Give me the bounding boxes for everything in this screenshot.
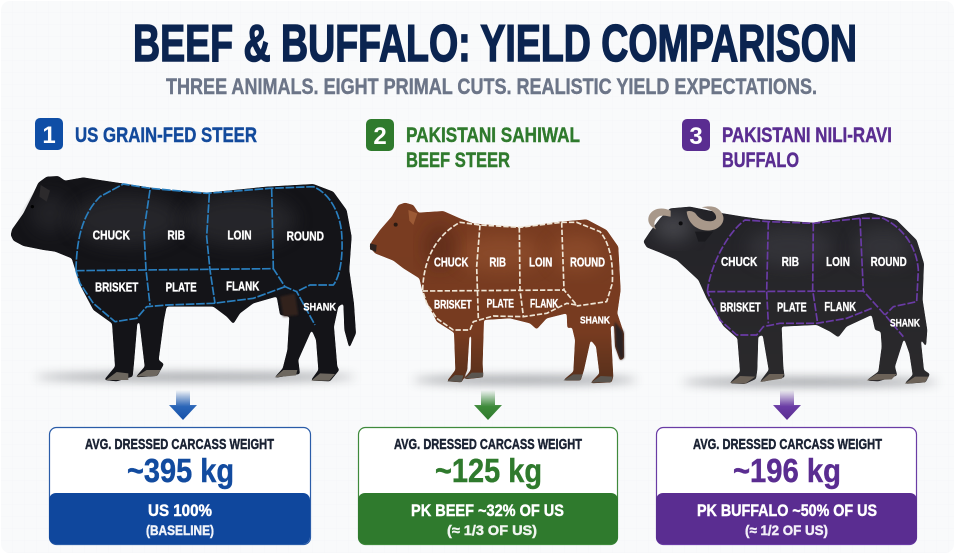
cut labels 1: CHUCK bbox=[93, 227, 130, 242]
badge 1: 1 bbox=[42, 122, 56, 149]
arrow 3 bbox=[773, 390, 801, 420]
heading 2: BEEF STEER bbox=[406, 149, 510, 172]
badge 2: 2 bbox=[373, 123, 387, 150]
cut labels 2: PLATE bbox=[487, 297, 514, 311]
heading 3: BUFFALO bbox=[722, 149, 799, 172]
cut labels 3: BRISKET bbox=[720, 300, 761, 315]
steer illustration 1 bbox=[11, 176, 356, 381]
cut labels 2: LOIN bbox=[529, 255, 552, 270]
stat card 2: PK BEEF ~32% OF US bbox=[411, 501, 564, 520]
cut labels 1: BRISKET bbox=[95, 280, 138, 295]
stat card 3: PK BUFFALO ~50% OF US bbox=[697, 501, 877, 520]
cut labels 3: LOIN bbox=[826, 254, 850, 269]
cut labels 1 bbox=[93, 227, 337, 313]
cut labels 3: FLANK bbox=[824, 299, 856, 314]
stat card 2: (≈ 1/3 OF US) bbox=[447, 522, 537, 538]
heading 1: US GRAIN-FED STEER bbox=[75, 124, 257, 147]
cut labels 2: FLANK bbox=[530, 297, 559, 311]
cut labels 2: SHANK bbox=[580, 315, 611, 326]
badge 1 bbox=[35, 118, 63, 150]
cut labels 3 bbox=[720, 254, 920, 330]
cut labels 2: RIB bbox=[489, 255, 506, 270]
ground shadow 1 bbox=[35, 373, 355, 381]
stat card 2: AVG. DRESSED CARCASS WEIGHT bbox=[394, 437, 582, 453]
ground shadow 2 bbox=[413, 376, 637, 384]
stat card 3: (≈ 1/2 OF US) bbox=[745, 522, 828, 538]
cut labels 2: BRISKET bbox=[434, 298, 472, 311]
cut labels 3: ROUND bbox=[871, 254, 907, 269]
ground shadow 3 bbox=[682, 378, 938, 386]
stat card 1: ~395 kg bbox=[127, 452, 234, 489]
badge 3: 3 bbox=[689, 123, 703, 150]
cut labels 1: SHANK bbox=[303, 301, 337, 313]
cut labels 3: SHANK bbox=[890, 318, 920, 330]
arrow 1 bbox=[169, 390, 197, 420]
stat card 1: (BASELINE) bbox=[146, 522, 214, 538]
panel: Pakistani Nili-Ravi buffalo bbox=[643, 119, 938, 544]
cut labels 1: RIB bbox=[167, 227, 185, 242]
steer illustration 2 bbox=[369, 203, 624, 383]
badge 2 bbox=[366, 119, 394, 151]
cut labels 1: ROUND bbox=[287, 229, 324, 244]
cut labels 2 bbox=[434, 255, 611, 326]
stat card 3 bbox=[656, 428, 917, 544]
cut labels 2: ROUND bbox=[570, 255, 605, 270]
panel: Pakistani Sahiwal beef steer bbox=[358, 119, 637, 544]
stat card 3: ~196 kg bbox=[733, 452, 841, 489]
badge 3 bbox=[682, 119, 710, 151]
cut labels 1: LOIN bbox=[227, 227, 252, 242]
stat card 3: AVG. DRESSED CARCASS WEIGHT bbox=[693, 437, 882, 453]
stat card 2: ~125 kg bbox=[435, 452, 542, 489]
heading 2 bbox=[406, 124, 580, 172]
heading 3: PAKISTANI NILI-RAVI bbox=[722, 124, 892, 147]
cut labels 1: FLANK bbox=[226, 279, 260, 294]
arrow 2 bbox=[474, 390, 502, 420]
heading 3 bbox=[722, 124, 892, 172]
cut labels 1: PLATE bbox=[166, 280, 197, 295]
stat card 1: AVG. DRESSED CARCASS WEIGHT bbox=[85, 437, 274, 453]
panel: US grain-fed steer bbox=[11, 118, 356, 544]
horns bbox=[648, 206, 723, 230]
cut labels 2: CHUCK bbox=[434, 255, 469, 270]
cut labels 3: CHUCK bbox=[721, 254, 758, 269]
cut labels 3: PLATE bbox=[777, 300, 807, 315]
stat card 1: US 100% bbox=[148, 501, 212, 520]
stat card 2 bbox=[358, 428, 618, 544]
cut labels 3: RIB bbox=[782, 254, 799, 269]
stat card 1 bbox=[49, 428, 310, 544]
heading 2: PAKISTANI SAHIWAL bbox=[406, 124, 580, 147]
subtitle: THREE ANIMALS. EIGHT PRIMAL CUTS. REALISTIC YIELD EXPECTATIONS. bbox=[166, 74, 817, 99]
buffalo illustration bbox=[643, 206, 930, 384]
